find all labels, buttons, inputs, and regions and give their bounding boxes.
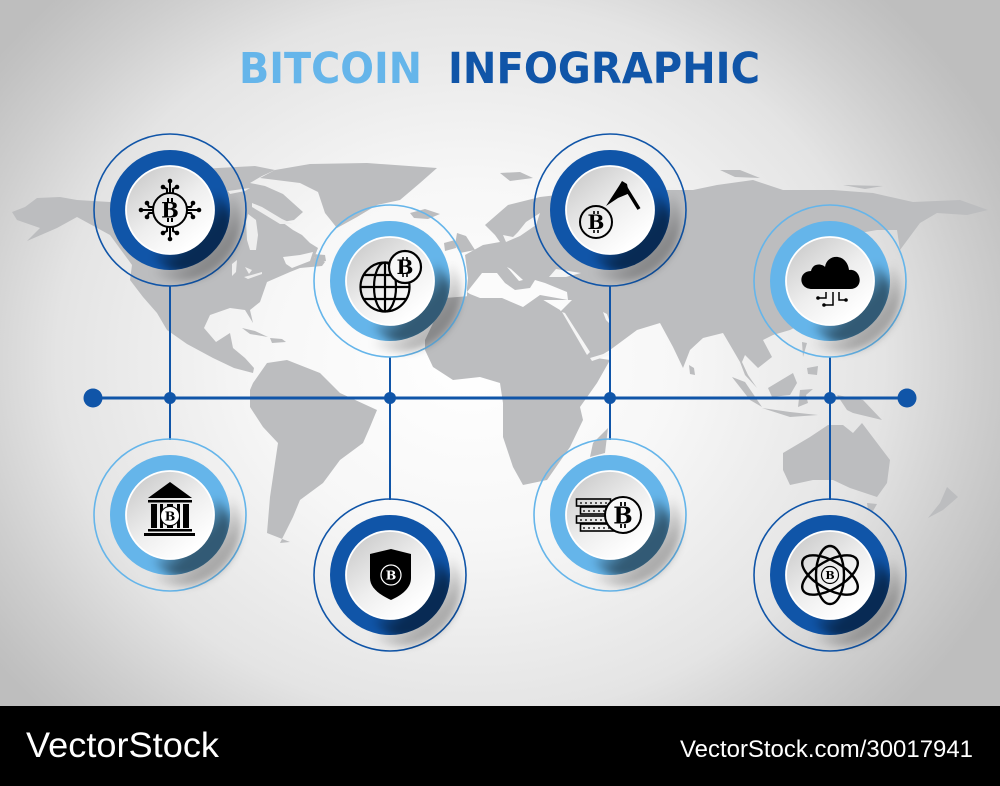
title	[239, 45, 760, 94]
icon: shield coin: B	[386, 568, 396, 582]
footer bar: VectorStock	[26, 726, 220, 765]
icon: pickaxe and coin: B	[588, 210, 604, 234]
icon: atom coin	[796, 546, 864, 604]
map seas	[228, 188, 611, 361]
node: globe bitcoin	[314, 205, 466, 357]
node: atom	[754, 499, 906, 651]
node: coin stack	[534, 439, 686, 591]
node: globe bitcoin: B	[397, 255, 413, 279]
icon: shield coin	[370, 549, 411, 600]
node: bank	[94, 439, 246, 591]
footer bar: VectorStock.com/30017941	[680, 736, 973, 763]
timeline connectors	[84, 286, 916, 500]
icon: circuit coin	[139, 179, 201, 241]
node: circuit bitcoin	[94, 134, 246, 286]
footer bar	[0, 706, 1000, 786]
bank coin glyph: B	[165, 508, 175, 524]
icon: cloud with traces	[801, 257, 860, 307]
node: pickaxe mining	[534, 134, 686, 286]
icon: globe with coin	[360, 251, 421, 312]
icon: atom coin: B	[825, 569, 835, 582]
title: INFOGRAPHIC	[448, 45, 760, 94]
icon: stacked coins: B	[613, 502, 633, 530]
icon: bank building	[144, 482, 195, 536]
icon: pickaxe and coin	[580, 181, 639, 238]
node: cloud circuit	[754, 205, 906, 357]
title: BITCOIN	[239, 45, 422, 94]
node: circuit bitcoin: B	[161, 198, 179, 222]
world map	[12, 163, 988, 543]
icon: stacked coins	[576, 497, 641, 533]
node: shield	[314, 499, 466, 651]
